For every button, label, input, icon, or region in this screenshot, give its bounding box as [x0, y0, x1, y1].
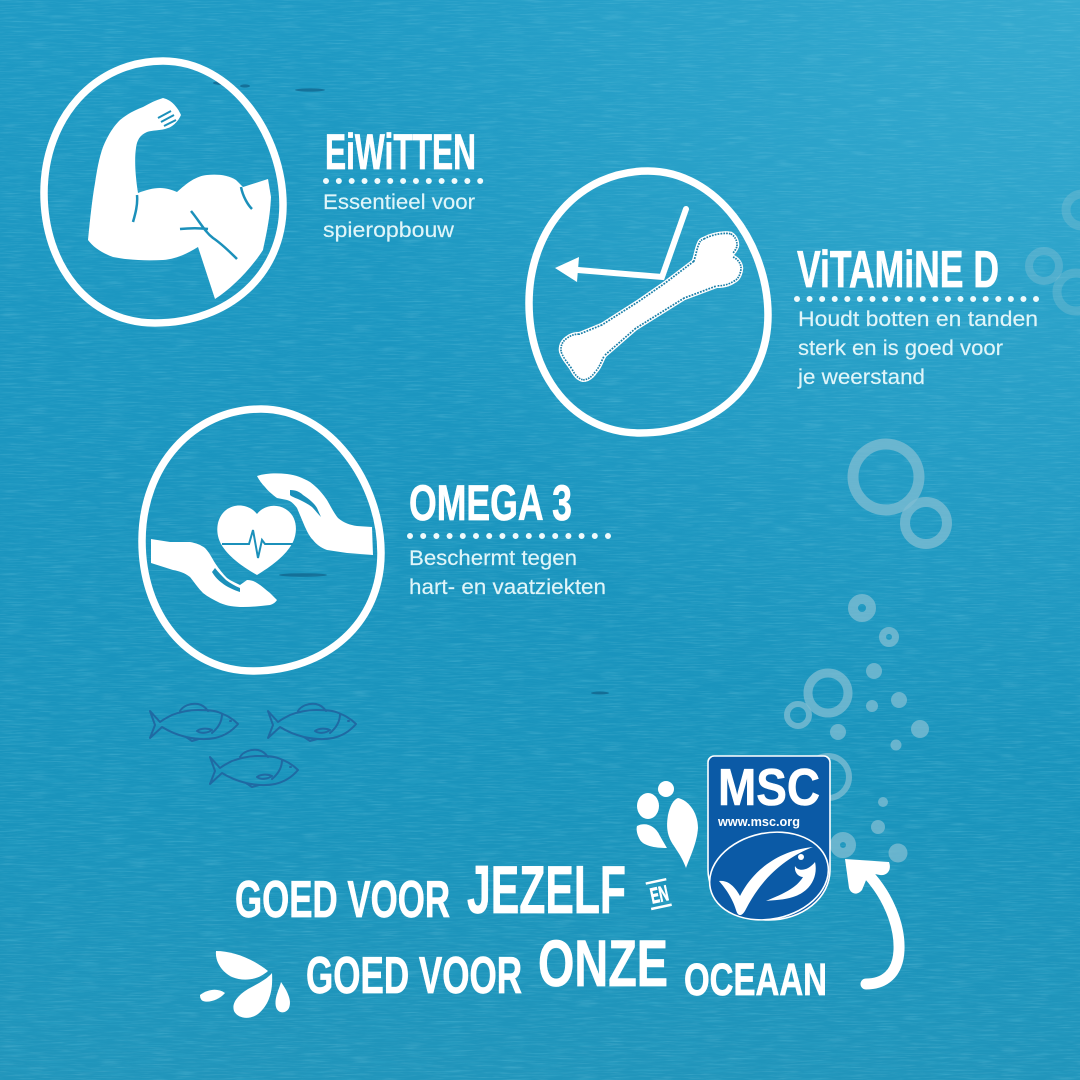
decorative bubbles	[787, 194, 1080, 862]
text: vitamine D description: Houdt botten en tanden	[798, 308, 1038, 331]
text: vitamine D description: je weerstand	[797, 366, 925, 389]
text: eiwitten description: Essentieel voor	[323, 191, 475, 214]
logo: MSC: MSC	[718, 759, 820, 817]
text: eiwitten description	[323, 191, 475, 242]
icon: flexed arm	[88, 98, 271, 299]
text: goed voor onze oceaan: ONZE	[538, 926, 668, 1000]
logo: MSC	[701, 756, 837, 931]
text: goed voor onze oceaan	[306, 926, 827, 1005]
icon: hands holding heart	[151, 473, 373, 607]
icon: fish 2	[268, 704, 356, 741]
slogan: goed voor jezelf en goed voor onze oceaan	[235, 852, 827, 1005]
egg outline: omega 3	[142, 409, 381, 671]
egg outline: eiwitten	[44, 61, 283, 323]
heading: eiwitten: EiWiTTEN	[325, 124, 476, 180]
text: eiwitten description: spieropbouw	[323, 219, 455, 242]
text: goed voor jezelf	[235, 852, 626, 929]
text: goed voor onze oceaan: GOED VOOR	[306, 947, 522, 1005]
text: omega 3 description: hart- en vaatziekten	[409, 576, 606, 599]
dotted divider	[797, 296, 1039, 302]
heading: omega 3: OMEGA 3	[409, 475, 572, 531]
text: goed voor jezelf: GOED VOOR	[235, 871, 450, 929]
logo: MSC: www.msc.org	[717, 814, 800, 829]
text: goed voor jezelf: JEZELF	[467, 852, 626, 928]
panel: vitamine D	[529, 171, 1039, 433]
panel: eiwitten	[44, 61, 483, 323]
text: en	[646, 879, 672, 909]
icon: fish 3	[210, 750, 298, 787]
icon: fish 1	[150, 704, 238, 741]
icon: splash near logo	[637, 781, 698, 868]
panel: omega 3	[142, 409, 610, 671]
text: omega 3 description: Beschermt tegen	[409, 547, 577, 570]
text: omega 3 description	[409, 547, 606, 599]
egg outline: vitamine D	[529, 171, 768, 433]
text: vitamine D description	[797, 308, 1038, 389]
icon: bone with angle arrow	[555, 209, 743, 382]
text: en: EN	[648, 880, 671, 909]
icon: splash bottom left	[200, 951, 290, 1018]
arrow: slogan to MSC logo	[845, 859, 899, 984]
text: vitamine D description: sterk en is goed voor	[798, 337, 1003, 360]
dotted divider	[410, 533, 610, 539]
dotted divider	[326, 178, 483, 184]
icon: school of fish	[150, 704, 356, 787]
text: goed voor onze oceaan: OCEAAN	[684, 954, 827, 1005]
